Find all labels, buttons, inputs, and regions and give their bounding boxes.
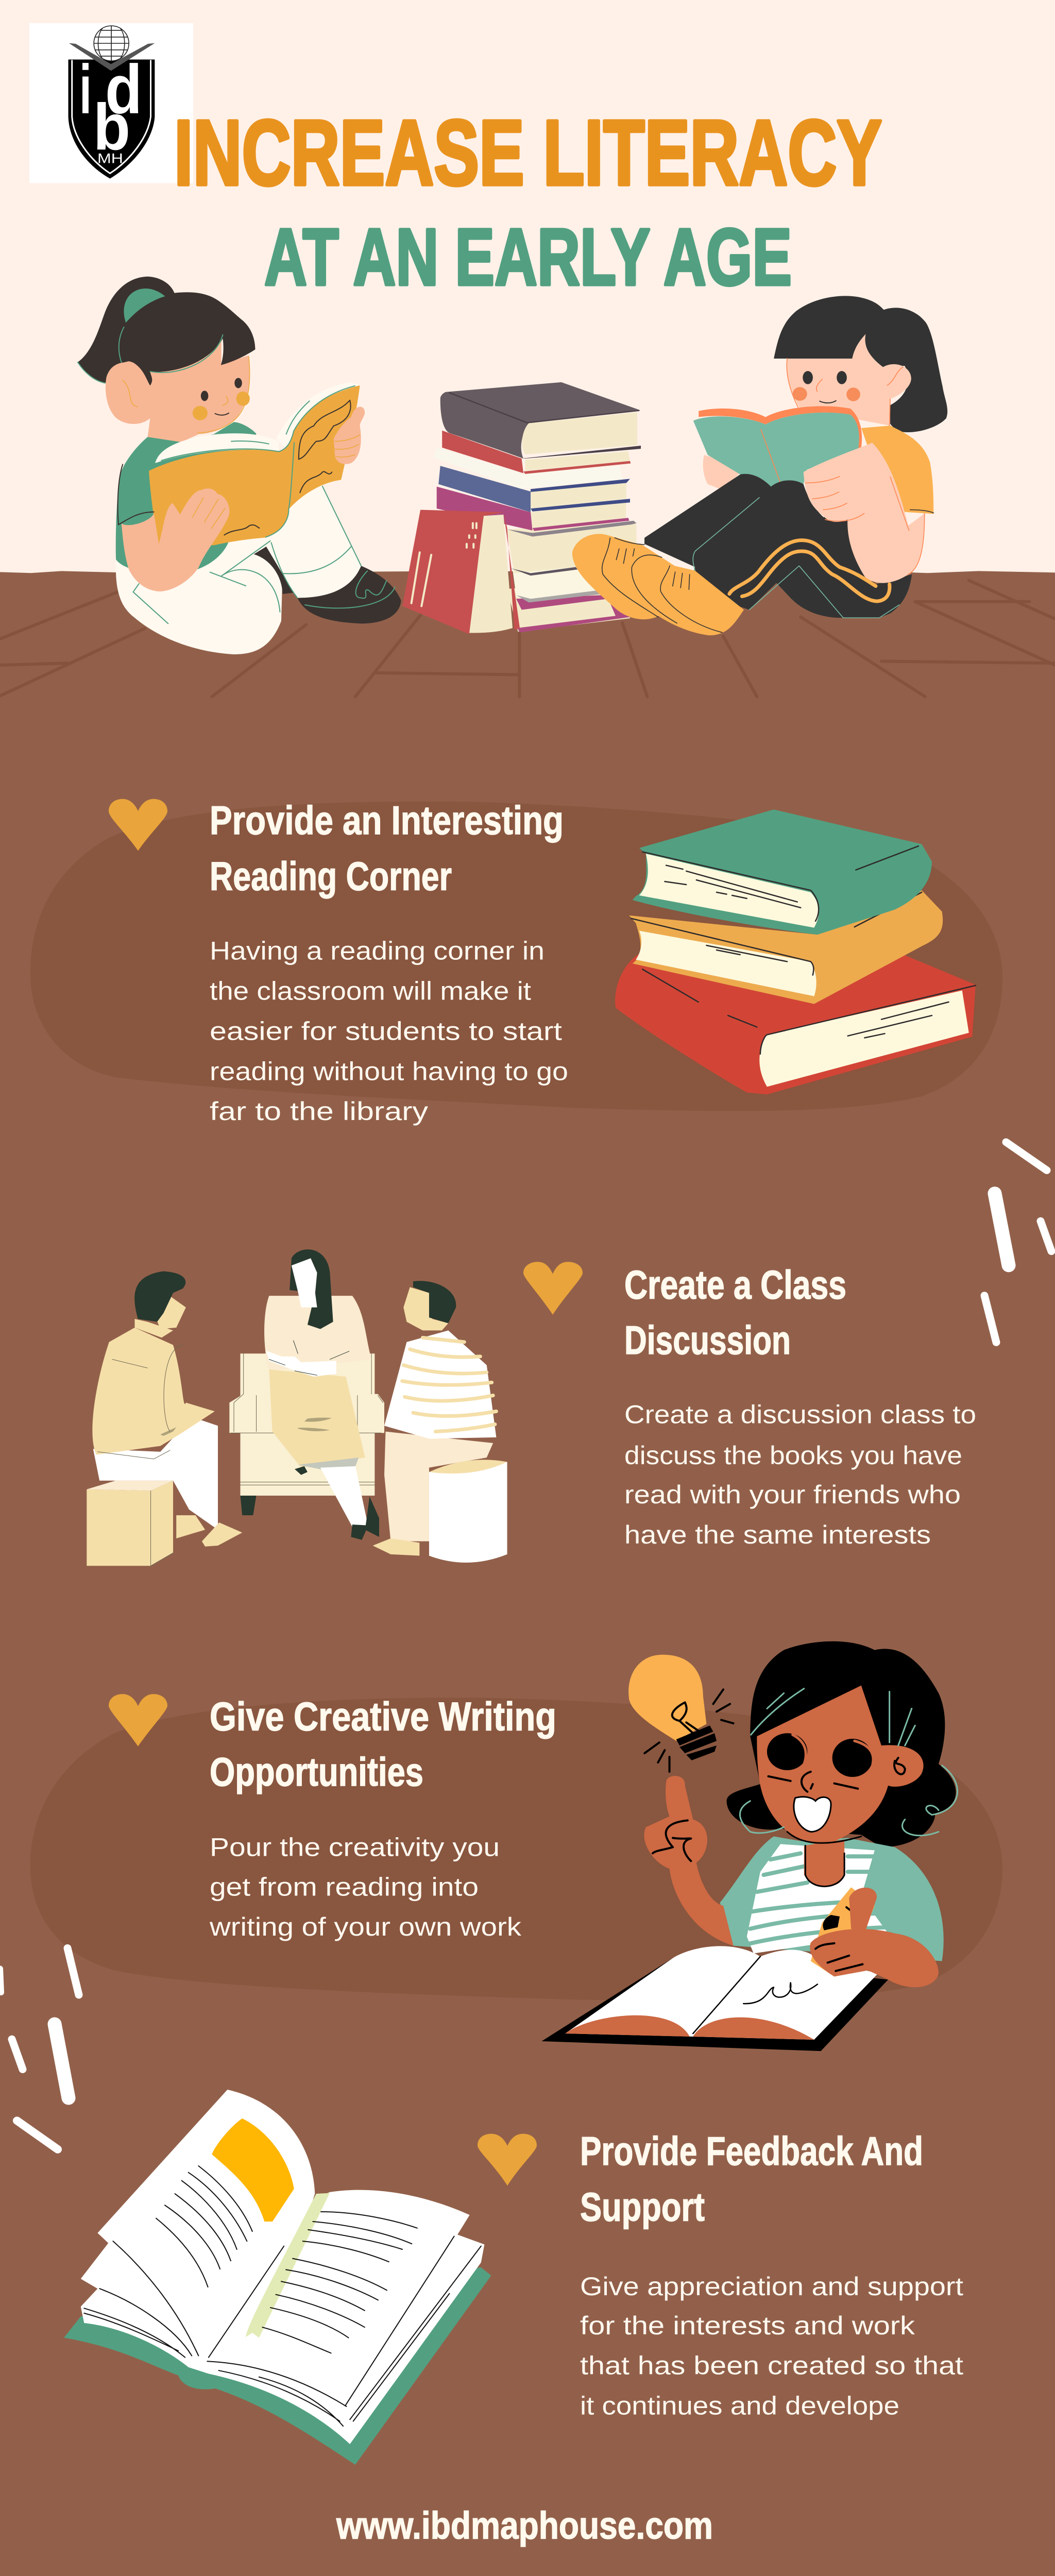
heading: reading corner: Reading Corner: [210, 853, 452, 899]
text: reading corner: far to the library: [210, 1096, 429, 1126]
text: feedback and support: Give appreciation and support: [580, 2272, 963, 2301]
logo letters: [79, 50, 142, 166]
text: creative writing: [209, 1833, 522, 1941]
heading: creative writing: Give Creative Writing: [210, 1693, 556, 1739]
logo: [29, 23, 193, 183]
text: feedback and support: [580, 2272, 963, 2420]
text: feedback and support: it continues and develope: [580, 2391, 899, 2420]
illustration: three people talking: [87, 1249, 507, 1566]
heading: reading corner: [210, 798, 564, 899]
illustration: open book: [64, 2090, 491, 2465]
panel: feedback and support: [64, 2090, 963, 2465]
text: reading corner: reading without having to go: [210, 1057, 568, 1086]
decorative strokes left: [0, 1948, 79, 2149]
heading: feedback and support: [580, 2128, 923, 2229]
heading: creative writing: Opportunities: [210, 1749, 423, 1794]
text: class discussion: [624, 1400, 976, 1549]
text: reading corner: the classroom will make it: [210, 976, 531, 1005]
logo letters: MH: [97, 151, 123, 166]
logo letters: b: [93, 91, 130, 164]
heading: class discussion: [624, 1262, 846, 1363]
logo letters: i: [79, 50, 92, 128]
icon: heart: [478, 2134, 537, 2185]
text: feedback and support: for the interests and work: [580, 2311, 915, 2340]
text: class discussion: read with your friends who: [624, 1480, 961, 1509]
illustration: girl with lightbulb writing: [541, 1641, 958, 2051]
icon: heart: [523, 1262, 583, 1315]
icon: heart: [109, 1694, 167, 1747]
panel: reading corner: [109, 798, 976, 1126]
floor: [0, 571, 1055, 2576]
text: class discussion: discuss the books you have: [624, 1440, 962, 1470]
text: feedback and support: that has been created so that: [580, 2351, 963, 2380]
text: creative writing: get from reading into: [210, 1872, 479, 1902]
heading: class discussion: Discussion: [624, 1317, 791, 1363]
illustration: girl reading teal book: [572, 296, 947, 635]
heading: feedback and support: Provide Feedback And: [580, 2128, 923, 2174]
text: reading corner: Having a reading corner in: [210, 936, 544, 965]
panel: class discussion: [87, 1249, 976, 1566]
floor planks: [0, 581, 1055, 697]
text: creative writing: writing of your own work: [209, 1912, 522, 1941]
text: class discussion: Create a discussion class to: [624, 1400, 976, 1429]
icon: heart: [109, 799, 167, 851]
logo letters: d: [105, 50, 142, 128]
text: reading corner: easier for students to start: [210, 1016, 562, 1045]
heading: creative writing: [210, 1693, 556, 1794]
heading: reading corner: Provide an Interesting: [210, 798, 564, 843]
title line 2: AT AN EARLY AGE: [264, 212, 792, 302]
section 1 blob: [30, 802, 1002, 1111]
logo shield: [69, 26, 155, 179]
heading: class discussion: Create a Class: [624, 1262, 846, 1307]
footer website: www.ibdmaphouse.com: [336, 2504, 713, 2547]
section 3 blob: [30, 1698, 1002, 2001]
text: reading corner: [210, 936, 568, 1126]
heading: feedback and support: Support: [580, 2184, 705, 2229]
illustration: girl reading orange book: [78, 277, 401, 654]
illustration: stack of books: [402, 382, 641, 634]
text: creative writing: Pour the creativity you: [210, 1833, 500, 1861]
illustration: three stacked books: [615, 809, 976, 1094]
text: class discussion: have the same interests: [624, 1520, 931, 1549]
decorative strokes right: [984, 1142, 1051, 1342]
panel: creative writing: [109, 1641, 958, 2051]
